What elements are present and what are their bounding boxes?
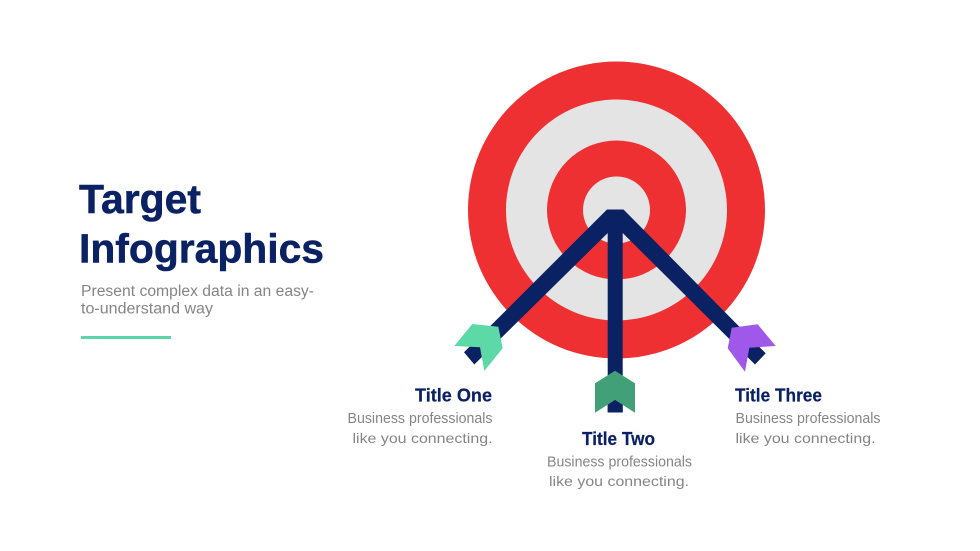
arrows <box>454 210 776 413</box>
title <box>79 176 324 272</box>
item: title one: Business professionals <box>348 411 492 427</box>
title: Infographics <box>79 226 324 272</box>
subtitle <box>81 283 314 318</box>
arrow three fletching <box>728 324 776 372</box>
item: title one <box>348 386 492 446</box>
item: title two <box>547 429 692 489</box>
item: title three: like you connecting. <box>736 430 876 446</box>
arrow two fletching <box>595 371 635 413</box>
item: title three: Business professionals <box>736 411 880 427</box>
arrow one fletching <box>454 324 503 371</box>
subtitle: Present complex data in an easy- <box>81 283 314 300</box>
item: title one: like you connecting. <box>352 430 492 446</box>
item: title two: Business professionals <box>547 454 692 470</box>
title: Target <box>79 176 201 222</box>
item: title three <box>735 386 880 446</box>
accent line <box>81 336 171 339</box>
item: title three: Title Three <box>735 386 822 406</box>
arrow shafts <box>464 210 766 412</box>
target <box>468 62 765 358</box>
item: title two: like you connecting. <box>549 473 689 489</box>
arrow two tail <box>608 400 623 412</box>
subtitle: to-understand way <box>81 300 213 318</box>
item: title one: Title One <box>415 386 492 406</box>
item: title two: Title Two <box>582 429 655 449</box>
